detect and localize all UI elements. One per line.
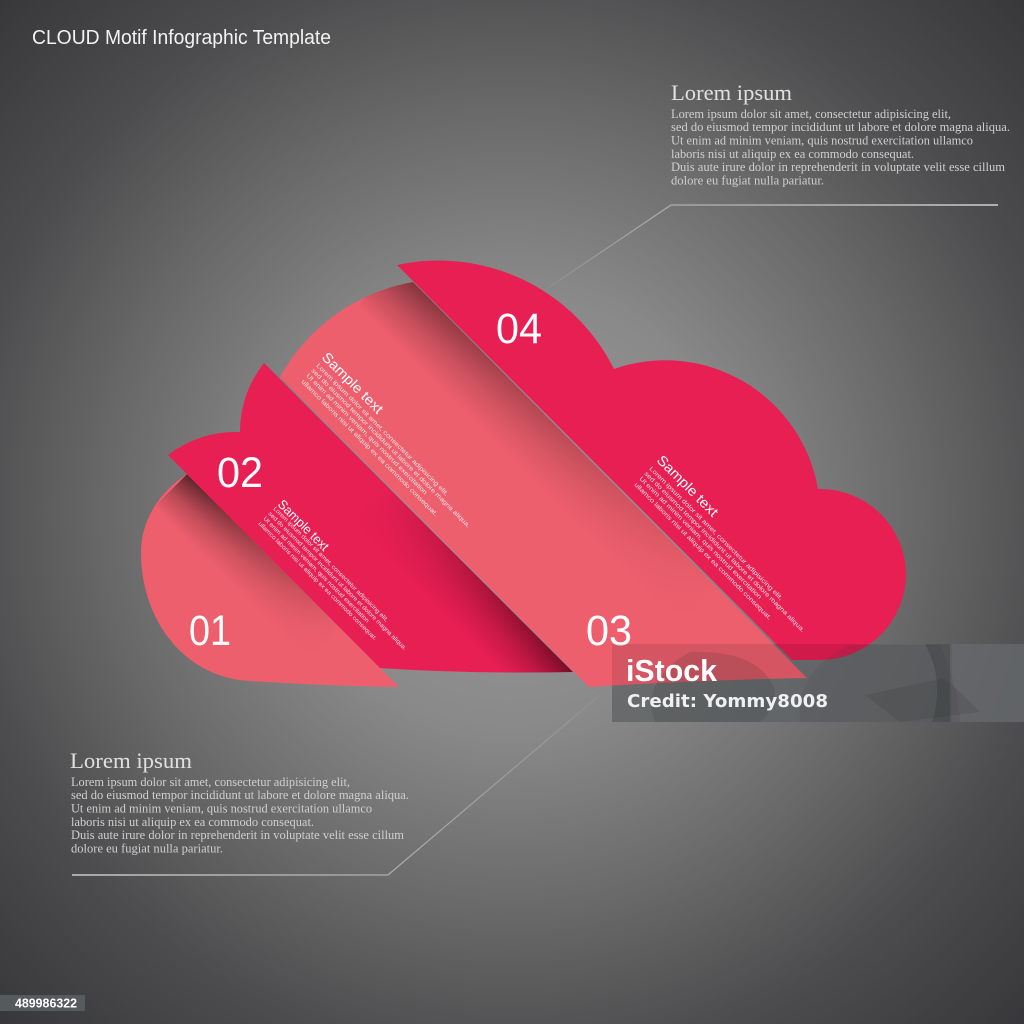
sample text 03: sed do eiusmod tempor incididunt ut labore et dolore magna aliqua. bbox=[310, 367, 472, 530]
sample text 03 bbox=[300, 349, 472, 530]
sample text 03: Lorem ipsum dolor sit amet, consectetur adipisicing elit, bbox=[315, 362, 450, 498]
sample text 03: Ut enim ad minim veniam, quis nostrud exercitation bbox=[305, 372, 429, 497]
watermark bbox=[612, 644, 1024, 722]
leader line: top right bbox=[545, 205, 998, 290]
piece 03 bbox=[280, 265, 807, 687]
callout body bbox=[671, 107, 1010, 188]
sample text 04: Lorem ipsum dolor sit amet, consectetur adipisicing elit, bbox=[648, 465, 784, 602]
callout body bbox=[71, 775, 409, 856]
sample text 02: Lorem ipsum dolor sit amet, consectetur adipisicing elit, bbox=[272, 506, 389, 624]
number 01: 01 bbox=[189, 607, 231, 655]
watermark credit: Credit: Yommy8008 bbox=[627, 691, 828, 712]
image id label: 489986322 bbox=[15, 996, 77, 1010]
watermark brand: iStock bbox=[626, 653, 718, 688]
piece 01 bbox=[141, 474, 399, 687]
sample text 04: Ut enim ad minim veniam, quis nostrud exercitation bbox=[638, 475, 763, 601]
sample text 02: ullamco laboris nisi ut aliquip ex ea commodo consequat. bbox=[257, 521, 378, 642]
callout body: sed do eiusmod tempor incididunt ut labore et dolore magna aliqua. bbox=[71, 788, 409, 802]
sample text 04: ullamco laboris nisi ut aliquip ex ea commodo consequat. bbox=[633, 481, 773, 622]
sample text 04 bbox=[633, 452, 806, 634]
piece 04 bbox=[397, 261, 906, 660]
watermark band bbox=[612, 644, 1024, 722]
piece 02 bbox=[168, 363, 573, 672]
callout body: dolore eu fugiat nulla pariatur. bbox=[71, 842, 223, 856]
callout heading: Lorem ipsum bbox=[70, 748, 192, 773]
callout body: Lorem ipsum dolor sit amet, consectetur adipisicing elit, bbox=[71, 775, 350, 789]
cloud bbox=[141, 261, 906, 709]
callout body: Duis aute irure dolor in reprehenderit in voluptate velit esse cillum bbox=[671, 160, 1006, 174]
callout body: Duis aute irure dolor in reprehenderit in voluptate velit esse cillum bbox=[71, 828, 405, 842]
leader line: bottom left bbox=[72, 695, 600, 875]
callout body: Ut enim ad minim veniam, quis nostrud exercitation ullamco bbox=[71, 802, 372, 816]
sample text 03: Sample text bbox=[319, 349, 387, 417]
title: CLOUD Motif Infographic Template bbox=[32, 27, 331, 49]
callout heading: Lorem ipsum bbox=[671, 80, 792, 105]
callout: top right bbox=[671, 80, 1010, 188]
callout body: laboris nisi ut aliquip ex ea commodo consequat. bbox=[71, 815, 314, 829]
sample text 03: ullamco laboris nisi ut aliquip ex ea commodo consequat. bbox=[300, 378, 439, 518]
sample text 02: Sample text bbox=[275, 497, 332, 554]
callout body: Ut enim ad minim veniam, quis nostrud exercitation ullamco bbox=[671, 134, 973, 148]
sample text 02: Ut enim ad minim veniam, quis nostrud exercitation bbox=[262, 516, 370, 624]
number 03: 03 bbox=[586, 607, 632, 655]
number 04: 04 bbox=[496, 305, 542, 353]
sample text 04: sed do eiusmod tempor incididunt ut labore et dolore magna aliqua. bbox=[643, 470, 806, 634]
number 02: 02 bbox=[217, 449, 263, 497]
callout: bottom left bbox=[70, 748, 409, 856]
callout body: sed do eiusmod tempor incididunt ut labore et dolore magna aliqua. bbox=[671, 120, 1010, 134]
callout body: laboris nisi ut aliquip ex ea commodo consequat. bbox=[671, 147, 914, 161]
image id label bbox=[0, 995, 85, 1011]
sample text 04: Sample text bbox=[654, 452, 722, 520]
sample text 02: sed do eiusmod tempor incididunt ut labore et dolore magna aliqua. bbox=[267, 511, 408, 652]
callout body: dolore eu fugiat nulla pariatur. bbox=[671, 174, 824, 188]
callout body: Lorem ipsum dolor sit amet, consectetur adipisicing elit, bbox=[671, 107, 951, 121]
